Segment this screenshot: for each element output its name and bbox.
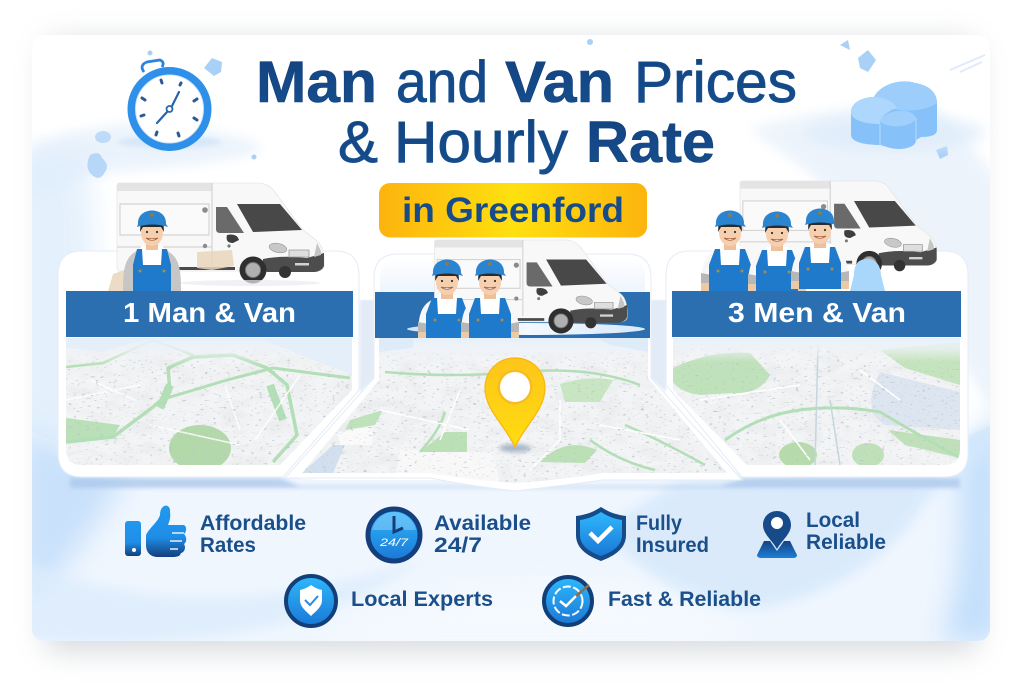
feature: fully insured: Insured (636, 534, 709, 557)
feature: available 24/7 (368, 509, 531, 561)
title: and (396, 50, 488, 115)
location badge (379, 183, 647, 238)
map (300, 338, 730, 488)
feature: local reliable: Reliable (806, 531, 886, 554)
panel shadows (70, 478, 960, 488)
icon: clock: 24/7 (379, 537, 409, 549)
icon: blue blocks (805, 81, 985, 151)
feature: affordable rates: Affordable (200, 512, 306, 535)
title: Van (505, 50, 614, 115)
title: Hourly (394, 110, 568, 175)
service name bar (66, 291, 353, 337)
small blue figure (850, 259, 885, 291)
map pin (485, 358, 545, 452)
icon: fast check dial (544, 577, 592, 625)
title: Man (256, 50, 377, 115)
icon: thumbs up (125, 506, 186, 557)
feature: fast and reliable (544, 577, 761, 625)
service name bar: 1 Man & Van (123, 297, 296, 328)
feature: local reliable: Local (806, 509, 860, 532)
parcels (108, 250, 234, 291)
feature: local experts (286, 576, 493, 626)
feature: affordable rates (125, 506, 306, 557)
location badge: in Greenford (402, 191, 624, 230)
feature: fully insured: Fully (636, 512, 682, 535)
van: two-men van (407, 240, 645, 340)
feature: fast and reliable: Fast & Reliable (608, 588, 761, 611)
van: three-men van (740, 181, 937, 276)
feature: local experts: Local Experts (351, 588, 493, 611)
icon: stopwatch (118, 60, 222, 148)
feature: affordable rates: Rates (200, 534, 256, 557)
feature: local reliable (757, 509, 886, 558)
icon: location on map (757, 511, 797, 558)
van: one-man van (117, 183, 324, 284)
icon: clock (368, 509, 420, 561)
icon: shield (576, 507, 626, 561)
panel sky (380, 258, 645, 292)
panel: 3 men and van (666, 181, 968, 477)
worker (123, 210, 181, 291)
decorative splashes (87, 39, 985, 178)
panel: 1 man and van (58, 183, 359, 477)
feature: fully insured (576, 507, 709, 561)
feature: available 24/7: Available (434, 512, 531, 535)
panel: 2 men and van with central map (285, 240, 742, 491)
service name bar (375, 292, 650, 338)
title (256, 50, 797, 175)
title: & (338, 110, 378, 175)
workers (701, 208, 849, 292)
title: Rate (586, 110, 715, 175)
service name bar (672, 291, 961, 337)
map (673, 338, 960, 468)
title: Prices (634, 50, 797, 115)
map (66, 338, 353, 471)
icon: shield badge (286, 576, 336, 626)
feature: available 24/7: 24/7 (434, 534, 482, 557)
service name bar: 3 Men & Van (728, 297, 906, 328)
